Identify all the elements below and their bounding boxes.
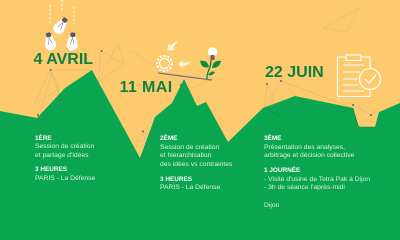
text block: session 3: 3ÈME [264,135,281,142]
date: 4 avril: 4 AVRIL [34,51,93,68]
text block: session 1: 3 HEURES [35,166,67,173]
text block: session 1: Session de création [35,143,94,150]
icon: balance with gear and seedling bulb [156,42,221,81]
faint geometric line art [34,8,371,155]
text block: session 1 [35,134,95,182]
text block: session 1: PARIS - La Défense [35,175,95,182]
icon: hanging light bulbs [45,0,78,50]
text block: session 2: 2ÈME [160,135,177,142]
text block: session 2 [160,134,232,191]
text block: session 3: arbitrage et décision collective [264,152,354,159]
text block: session 3: - Visite d'usine de Tetra Pak à Dijon [264,176,370,182]
text block: session 3: Présentation des analyses, [264,144,345,151]
text block: session 2: PARIS - La Défense [160,184,220,191]
green mountains [0,70,400,226]
date: 22 juin: 22 JUIN [265,64,324,81]
icon: clipboard with check mark [336,54,382,97]
text block: session 2: Session de création [160,144,219,151]
text block: session 3: Dijon [264,202,279,209]
text block: session 3: 1 JOURNÉE [264,167,300,174]
text block: session 3: - 3h de séance l'après-midi [264,184,345,191]
text block: session 2: 3 HEURES [160,176,192,182]
text block: session 1: et partage d'idées [35,152,88,159]
text block: session 1: 1ÈRE [35,134,52,142]
text block: session 2: et hiérarchisation [160,152,211,159]
date: 11 mai: 11 MAI [120,79,173,96]
text block: session 2: des idées vs contraintes [160,161,232,168]
text block: session 3 [264,134,370,209]
